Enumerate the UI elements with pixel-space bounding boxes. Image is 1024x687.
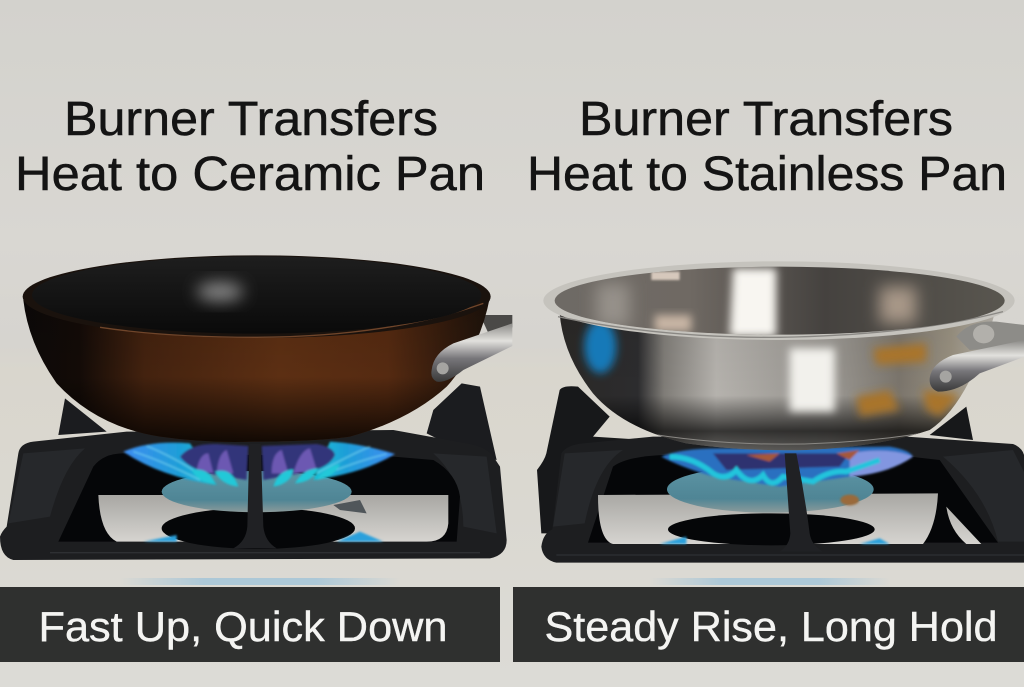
rust stains [856, 343, 960, 417]
title: stainless: Burner Transfers [579, 93, 953, 146]
grate leg facet [553, 450, 1024, 542]
pan exterior [23, 297, 490, 442]
caption: stainless [513, 587, 1024, 662]
flame streaks [133, 446, 387, 480]
stove scene: stainless [537, 386, 1024, 563]
lilac right flame [850, 451, 913, 477]
pan interior [32, 256, 481, 334]
grate frame [541, 437, 1024, 563]
burner shadow [668, 513, 875, 545]
warm reflections [651, 272, 680, 280]
base ring [656, 433, 919, 445]
outer flame fans [123, 443, 217, 485]
ignitor [333, 500, 367, 513]
interior reflections [596, 268, 916, 337]
title: ceramic [15, 93, 485, 201]
interior glare [197, 282, 243, 301]
handle rivet [437, 362, 449, 374]
rust mark [840, 495, 859, 505]
flames [123, 442, 395, 487]
flames [661, 447, 913, 487]
blue reflection [584, 320, 616, 373]
stove top opening [588, 455, 998, 543]
burner shadow [162, 508, 355, 549]
centre grate stem [780, 453, 823, 552]
outer flame body [661, 447, 913, 487]
title: ceramic: Burner Transfers [64, 93, 438, 146]
white vertical highlight [790, 348, 835, 412]
blue glow reflections [660, 537, 890, 544]
grate bottom highlight [556, 553, 1024, 557]
title: ceramic: Heat to Ceramic Pan [15, 148, 485, 201]
glass reflection [98, 495, 448, 542]
rim front shadow [558, 312, 1003, 337]
purple inner flames [180, 444, 335, 480]
white highlight [730, 268, 776, 337]
caption: ceramic: Fast Up, Quick Down [38, 603, 448, 650]
rim [543, 261, 1015, 340]
stainless pan body [543, 261, 1024, 450]
grate bottom highlight [50, 551, 480, 555]
burner cap [162, 471, 352, 512]
rim front edge [100, 303, 483, 337]
glass reflection [598, 493, 981, 544]
cyan flame tips [192, 464, 340, 487]
flame reflection on counter [650, 578, 890, 585]
purple inner flame [713, 453, 850, 470]
centre grate stem [233, 444, 277, 548]
grate back legs [58, 383, 497, 460]
panel: ceramic pan [0, 0, 513, 687]
handle [930, 340, 1024, 392]
cyan flame ribbon [670, 457, 880, 483]
caption: ceramic [0, 587, 500, 662]
pan exterior [560, 313, 995, 450]
handle strap [480, 315, 512, 337]
handle [431, 323, 512, 382]
rim [23, 255, 491, 338]
caption: stainless: Steady Rise, Long Hold [544, 603, 998, 650]
blue glow reflections [143, 532, 383, 542]
handle strap [956, 322, 1024, 350]
title: stainless: Heat to Stainless Pan [527, 148, 1007, 201]
wall and counter background [513, 0, 1024, 687]
burner cap [667, 466, 874, 513]
orange flame tips [746, 450, 860, 462]
exterior reflections [584, 320, 960, 444]
grate frame [0, 430, 507, 560]
handle rivet top [973, 325, 994, 343]
grate back legs [537, 386, 973, 533]
grate leg facet [8, 448, 497, 533]
wall and counter background [0, 0, 513, 687]
panel: stainless pan [513, 100, 1024, 662]
stove top opening [58, 453, 460, 542]
handle rivet [940, 371, 952, 383]
title: stainless [527, 93, 1007, 201]
ceramic pan body [23, 255, 512, 442]
pan interior [555, 267, 1005, 335]
stove scene: ceramic [0, 383, 507, 560]
flame reflection on counter [120, 578, 400, 585]
